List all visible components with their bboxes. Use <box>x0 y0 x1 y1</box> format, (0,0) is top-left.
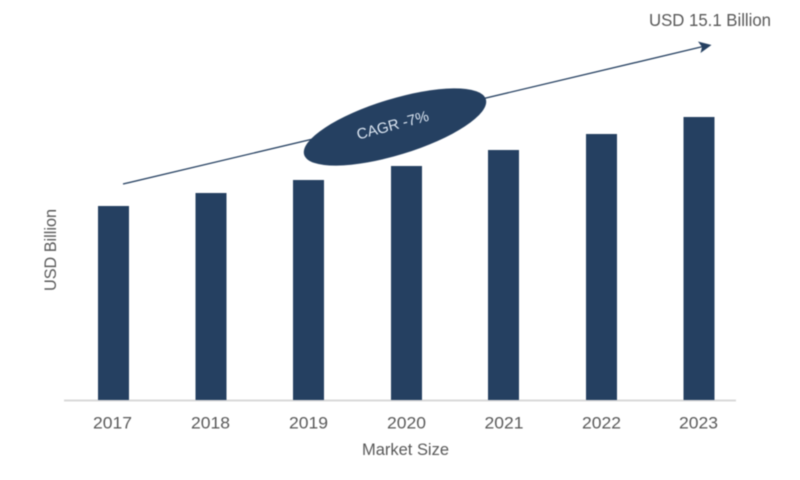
bars by year <box>98 117 714 400</box>
x axis year labels: 2021 <box>484 414 524 432</box>
growth arrow <box>123 42 712 184</box>
x axis year labels: 2022 <box>582 414 621 432</box>
x axis year labels: 2017 <box>93 414 132 432</box>
y axis title: USD Billion <box>42 209 60 291</box>
CAGR ellipse callout <box>296 72 494 182</box>
x axis year labels: 2019 <box>289 414 328 432</box>
end value label: USD 15.1 Billion <box>649 10 771 30</box>
x axis year labels: 2020 <box>387 414 426 432</box>
x axis line <box>64 400 736 402</box>
x axis year labels <box>93 414 718 432</box>
x axis year labels: 2018 <box>191 414 230 432</box>
CAGR ellipse callout: CAGR -7% <box>355 108 431 143</box>
x axis title: Market Size <box>362 441 449 459</box>
x axis year labels: 2023 <box>679 414 718 432</box>
